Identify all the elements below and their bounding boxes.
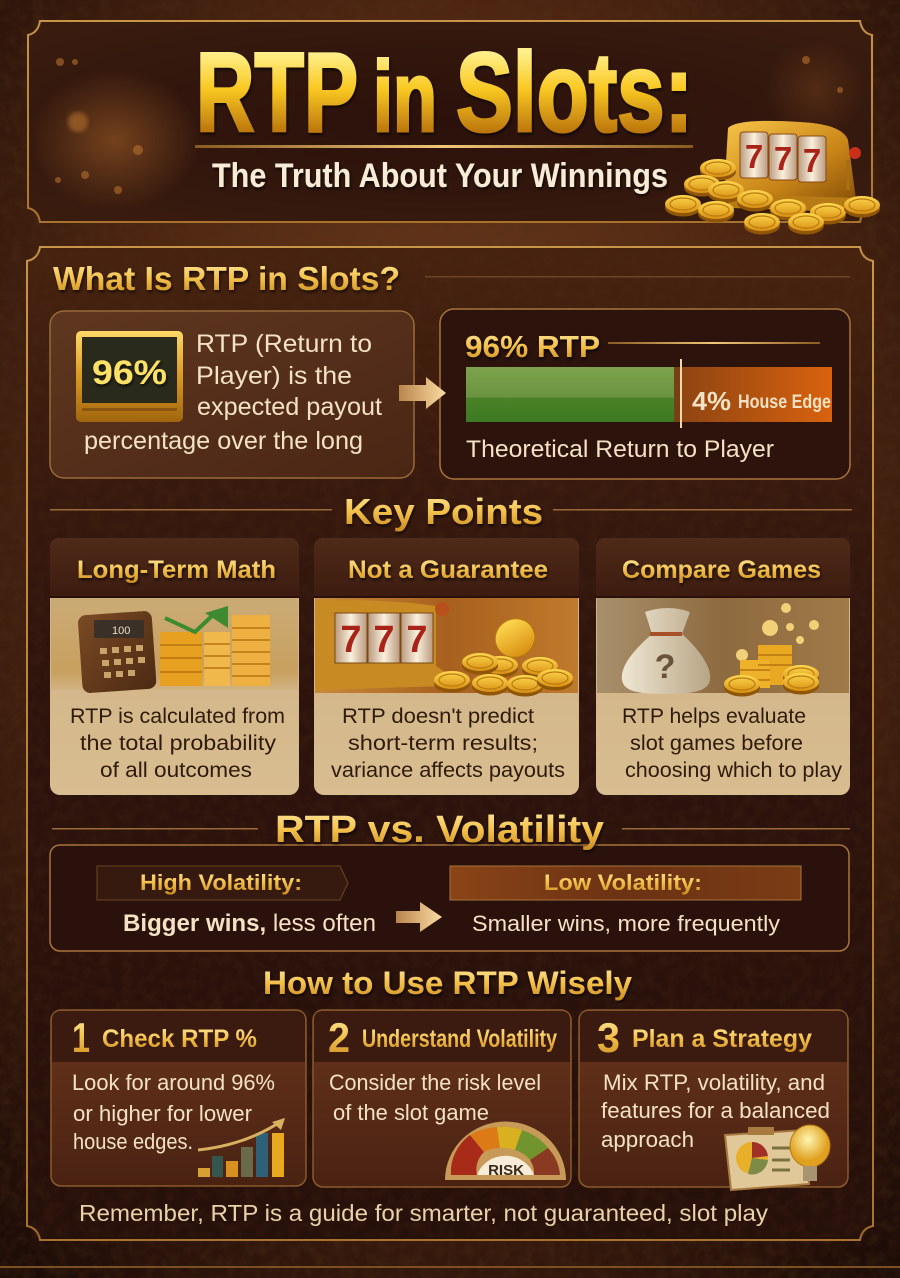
- icon: slot machine and coins: 7: [406, 619, 428, 661]
- card text: [70, 705, 285, 782]
- heading: key points: Key Points: [344, 491, 543, 532]
- card title: Long-Term Math: [77, 556, 276, 584]
- card text: slot games before: [630, 732, 803, 755]
- panel: header: [28, 21, 872, 222]
- icon: 96% badge: [76, 331, 183, 422]
- low volatility label: [450, 866, 801, 900]
- definition text: [84, 330, 382, 455]
- card text: the total probability: [80, 732, 277, 755]
- high volatility label: High Volatility:: [140, 870, 302, 895]
- icon: slot machine with coins: 7: [774, 140, 792, 177]
- step title: Check RTP %: [102, 1025, 257, 1053]
- card text: RTP is calculated from: [70, 705, 285, 728]
- step text: approach: [601, 1127, 694, 1152]
- bar chart: return vs house edge: 4%: [692, 386, 731, 416]
- bar label: 96% RTP: [465, 329, 600, 364]
- step text: of the slot game: [333, 1100, 489, 1125]
- bar chart: return vs house edge: [466, 359, 832, 428]
- high volatility text: Bigger wins, less often: [123, 910, 376, 937]
- footer note: Remember, RTP is a guide for smarter, not guaranteed, slot play: [79, 1200, 769, 1226]
- step text: [329, 1070, 541, 1125]
- panel: compare games: [596, 538, 850, 795]
- bottom gold edge: [0, 1266, 900, 1268]
- definition text: expected payout: [197, 393, 382, 421]
- step text: house edges.: [73, 1129, 193, 1154]
- low volatility label: Low Volatility:: [544, 870, 702, 895]
- step text: [72, 1070, 275, 1154]
- step text: or higher for lower: [73, 1101, 252, 1126]
- heading: RTP vs volatility: RTP vs. Volatility: [275, 809, 604, 851]
- panel: main body frame: [27, 247, 873, 1240]
- panel: step 3: [579, 1010, 848, 1190]
- card text: [622, 705, 843, 782]
- icon: clipboard and light bulb: [725, 1125, 830, 1190]
- panel: RTP definition: [50, 311, 414, 478]
- panel: long-term math: [50, 538, 299, 795]
- step text: Mix RTP, volatility, and: [603, 1070, 825, 1095]
- bar caption: Theoretical Return to Player: [466, 436, 774, 463]
- card text: [331, 705, 565, 782]
- definition text: RTP (Return to: [196, 330, 372, 358]
- step text: Look for around 96%: [72, 1070, 275, 1095]
- icon: slot machine and coins: 7: [373, 619, 395, 661]
- title: [196, 30, 693, 155]
- card text: variance affects payouts: [331, 759, 565, 782]
- icon: risk gauge: [445, 1122, 566, 1180]
- icon: risk gauge: RISK: [488, 1162, 524, 1179]
- step text: features for a balanced: [601, 1098, 830, 1123]
- definition text: percentage over the long: [84, 427, 363, 455]
- step title: Understand Volatility: [362, 1025, 557, 1053]
- step title: Plan a Strategy: [632, 1025, 812, 1053]
- panel: step 1: [51, 1010, 306, 1186]
- low volatility text: Smaller wins, more frequently: [472, 911, 780, 936]
- panel: not a guarantee: [314, 538, 579, 795]
- arrow: [399, 377, 446, 409]
- icon: rising bar chart: [198, 1118, 285, 1177]
- title: RTP: [196, 30, 358, 155]
- panel: 96% RTP bar: [440, 309, 850, 479]
- step text: Consider the risk level: [329, 1070, 541, 1095]
- icon: slot machine with coins: [665, 121, 880, 234]
- icon: calculator and coin stacks: 100: [112, 625, 130, 637]
- heading: how to use RTP wisely: How to Use RTP Wisely: [263, 965, 632, 1001]
- card title: Compare Games: [622, 556, 821, 584]
- subtitle: The Truth About Your Winnings: [212, 157, 668, 195]
- panel: volatility comparison: [50, 845, 849, 951]
- heading: what is RTP: What Is RTP in Slots?: [53, 260, 400, 297]
- card text: choosing which to play: [625, 759, 843, 782]
- icon: 96% badge: 96%: [92, 354, 167, 392]
- bar chart: return vs house edge: House Edge: [738, 392, 831, 413]
- panel: step 2: [313, 1010, 571, 1187]
- definition text: Player) is the: [196, 362, 352, 390]
- arrow: [396, 902, 442, 932]
- title rule: [195, 145, 693, 148]
- title: in: [373, 41, 437, 153]
- icon: slot machine and coins: 7: [340, 619, 362, 661]
- step number: 1: [72, 1014, 90, 1061]
- title: Slots:: [456, 30, 693, 155]
- icon: slot machine and coins: [315, 600, 573, 696]
- card text: RTP helps evaluate: [622, 705, 806, 728]
- icon: calculator and coin stacks: [78, 606, 270, 693]
- icon: money bag and coins: ?: [655, 648, 675, 686]
- icon: slot machine with coins: 7: [745, 138, 763, 175]
- high volatility label: [97, 866, 348, 900]
- icon: money bag and coins: [622, 603, 819, 696]
- card text: of all outcomes: [100, 759, 252, 782]
- step number: 3: [597, 1014, 620, 1061]
- card text: short-term results;: [348, 732, 538, 755]
- step text: [601, 1070, 830, 1152]
- step number: 2: [328, 1014, 350, 1061]
- icon: slot machine with coins: 7: [803, 142, 821, 179]
- card title: Not a Guarantee: [348, 556, 548, 584]
- card text: RTP doesn't predict: [342, 705, 534, 728]
